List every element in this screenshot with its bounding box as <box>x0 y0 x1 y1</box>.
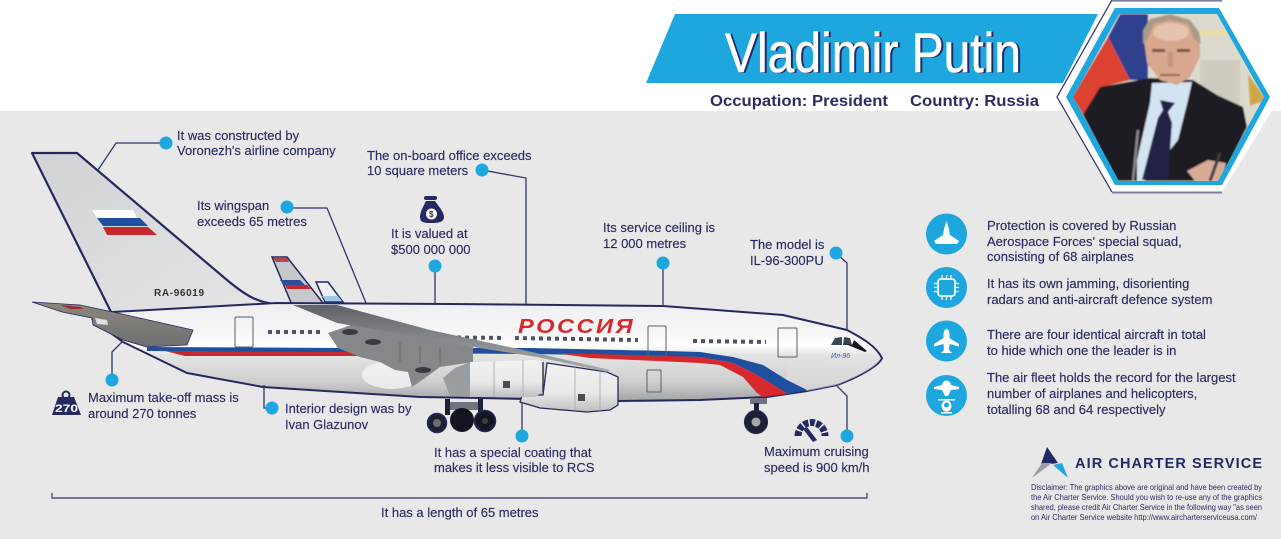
fact: protection <box>926 214 1182 264</box>
disclaimer: shared, please credit Air Charter Service in the following way "as seen <box>1031 502 1262 512</box>
callout: value <box>391 226 471 304</box>
callout: on-board office <box>367 148 532 304</box>
callout: service ceiling: Its service ceiling is <box>603 220 715 235</box>
callout: model: The model is <box>750 237 825 252</box>
callout: interior design <box>264 385 412 432</box>
fact: protection: Aerospace Forces' special squad, <box>987 234 1182 249</box>
grey background panel <box>0 111 1281 539</box>
callout: coating: It has a special coating that <box>434 445 592 460</box>
icon: money bag: $ <box>429 210 434 219</box>
callout: wingspan: exceeds 65 metres <box>197 214 307 229</box>
fact: jamming <box>926 267 1212 308</box>
occupation and country: Occupation: President <box>710 93 888 110</box>
livery stripes <box>147 347 807 397</box>
callout: interior design: Interior design was by <box>285 401 412 416</box>
title banner <box>646 14 1098 84</box>
fact: protection: Protection is covered by Russian <box>987 218 1176 233</box>
callout: on-board office: 10 square meters <box>367 163 469 178</box>
engine two <box>520 363 618 412</box>
occupation and country: Country: Russia <box>910 93 1039 110</box>
cockpit <box>831 337 867 360</box>
callout: wingspan <box>197 198 366 303</box>
callout: take-off mass: Maximum take-off mass is <box>88 390 239 405</box>
doors <box>235 317 797 392</box>
light belly patch <box>362 361 422 389</box>
disclaimer: Disclaimer: The graphics above are original and have been created by <box>1031 482 1263 492</box>
icon: 270 weight: 270 <box>55 403 78 415</box>
fact: identical aircraft: to hide which one the leader is in <box>987 343 1176 358</box>
callout: value: It is valued at <box>391 226 468 241</box>
callout: service ceiling: 12 000 metres <box>603 236 687 251</box>
cockpit: Ил-96 <box>831 353 850 360</box>
wing <box>293 305 610 372</box>
registration: RA-96019 <box>154 288 204 299</box>
icon: plane <box>926 320 967 362</box>
callout: constructed by: Voronezh's airline company <box>177 143 336 158</box>
far wing winglets <box>272 257 343 305</box>
callout: coating: makes it less visible to RCS <box>434 460 595 475</box>
callout: coating <box>434 402 595 475</box>
icon: 270 weight <box>52 392 81 415</box>
fuselage <box>93 303 882 401</box>
callout: constructed by: It was constructed by <box>177 128 300 143</box>
callout: model: IL-96-300PU <box>750 253 824 268</box>
tail fin <box>32 153 276 316</box>
callout: cruising speed: Maximum cruising <box>764 444 869 459</box>
russia lettering: РОССИЯ <box>518 316 635 338</box>
fact: identical aircraft <box>926 320 1206 362</box>
tail flag <box>92 210 157 235</box>
stabilizer and tail cone <box>32 302 193 347</box>
length bracket <box>52 493 867 520</box>
nose tint <box>787 358 881 391</box>
fact: air fleet <box>926 370 1236 417</box>
airplane <box>32 153 882 434</box>
occupation and country <box>710 93 1039 110</box>
icon: plane and helicopter <box>926 375 967 416</box>
callout: cruising speed <box>764 385 870 475</box>
callout: interior design: Ivan Glazunov <box>285 417 369 432</box>
windows <box>268 332 766 342</box>
icon: speed gauge <box>798 422 825 442</box>
disclaimer: on Air Charter Service website http://www.aircharterserviceusa.com/ <box>1031 512 1258 522</box>
callout: on-board office: The on-board office exceeds <box>367 148 532 163</box>
logo: air charter service: AIR CHARTER SERVICE <box>1075 456 1262 472</box>
callout: constructed by <box>98 128 336 170</box>
icon: fighter jet <box>926 214 967 254</box>
icon: money bag <box>420 196 444 223</box>
main landing gear <box>428 399 496 432</box>
fact: identical aircraft: There are four identical aircraft in total <box>987 327 1206 342</box>
callout: value: $500 000 000 <box>391 242 471 257</box>
fact: jamming: radars and anti-aircraft defence system <box>987 292 1212 307</box>
engine one <box>443 360 600 411</box>
callout: take-off mass <box>88 341 239 421</box>
length bracket: It has a length of 65 metres <box>381 505 539 520</box>
fact: air fleet: totalling 68 and 64 respectively <box>987 402 1166 417</box>
wing underside and flaps <box>328 322 473 387</box>
callout: take-off mass: around 270 tonnes <box>88 406 197 421</box>
title banner: Vladimir Putin <box>725 21 1021 84</box>
portrait hexagon <box>1057 0 1275 192</box>
fact: jamming: It has its own jamming, disorienting <box>987 276 1189 291</box>
callout: model <box>750 237 847 331</box>
callout: service ceiling <box>603 220 715 306</box>
disclaimer <box>1031 482 1263 522</box>
fact: air fleet: The air fleet holds the record for the largest <box>987 370 1236 385</box>
callout: wingspan: Its wingspan <box>197 198 269 213</box>
fact: protection: consisting of 68 airplanes <box>987 249 1134 264</box>
title banner: Vladimir Putin <box>727 22 1023 84</box>
callout: cruising speed: speed is 900 km/h <box>764 460 870 475</box>
fact: air fleet: number of airplanes and helicopters, <box>987 386 1197 401</box>
logo: air charter service <box>1032 447 1262 478</box>
icon: chip <box>926 267 967 308</box>
disclaimer: the Air Charter Service. Should you wish to re-use any of the graphics <box>1031 492 1262 502</box>
nose landing gear <box>744 398 768 434</box>
